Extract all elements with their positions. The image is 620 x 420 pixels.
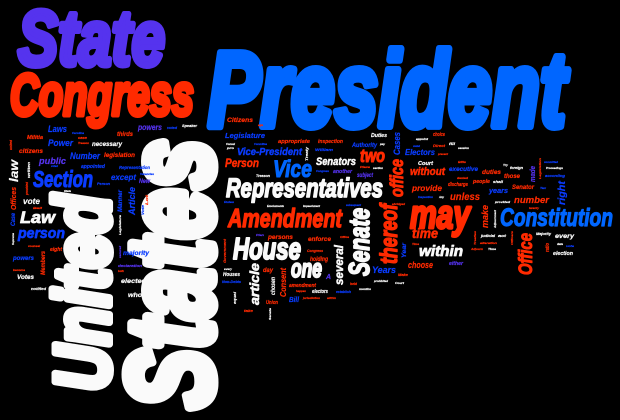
words: upper centre cluster: enforce	[308, 237, 332, 243]
words: right cluster: Adjourn	[470, 247, 483, 251]
words: lower left cluster: become	[13, 268, 25, 272]
words: lower centre cluster: Years	[372, 265, 396, 275]
medium words: left cluster	[7, 123, 162, 226]
medium words: left cluster: public	[38, 156, 66, 166]
words: upper centre cluster: Committee	[254, 142, 267, 146]
words: right cluster: Senator	[512, 185, 535, 191]
words: right cluster: every	[555, 234, 575, 240]
small words: left cluster: Militia	[27, 135, 43, 141]
words: right cluster: provide	[411, 184, 443, 193]
words: right cluster: foreign	[510, 166, 523, 170]
words: lower centre cluster: electors	[312, 289, 328, 295]
words: right cluster: made	[530, 166, 537, 182]
words: lower centre cluster: choose	[408, 260, 433, 270]
words: right cluster: unless	[450, 192, 480, 203]
words: upper centre cluster: Emoluments	[267, 204, 284, 208]
word: may: may	[410, 193, 471, 237]
word: House: House	[233, 231, 301, 266]
words: upper centre cluster: inspection	[318, 139, 343, 145]
words: right cluster: election	[553, 251, 573, 257]
medium words: left cluster: thirds	[117, 132, 134, 138]
words: right cluster: Proceedings	[546, 166, 563, 170]
words: lower centre cluster: day	[263, 268, 274, 274]
words: lower left cluster: powers	[12, 256, 35, 262]
words: lower left cluster: counsel	[28, 244, 40, 248]
word: Office: Office	[516, 233, 537, 275]
words: right cluster: appoint	[416, 137, 429, 141]
words: right cluster: according	[545, 173, 566, 178]
words: lower centre cluster: establish	[336, 289, 351, 294]
word: Section: Section	[33, 166, 93, 192]
word: person: person	[17, 225, 65, 242]
words: upper centre cluster: Treason	[256, 173, 270, 178]
words: upper centre cluster: appropriate	[278, 139, 310, 145]
words: right cluster: Officers	[510, 231, 514, 245]
words: right cluster: twenty	[529, 206, 539, 210]
words: right cluster: right	[557, 180, 568, 205]
words: right cluster: Direct	[433, 143, 446, 148]
words: right cluster: vested	[413, 144, 420, 148]
words: lower left cluster	[12, 244, 150, 299]
words: lower left cluster: eight	[50, 247, 62, 253]
words: upper centre cluster: Legislature	[225, 133, 265, 140]
words: right cluster: choice	[433, 132, 445, 138]
words: right cluster: Time	[488, 247, 496, 251]
words: upper centre cluster: Place	[360, 165, 370, 169]
words: lower centre cluster: chosen	[271, 277, 277, 295]
words: upper centre cluster: pay	[379, 142, 385, 146]
words: upper centre cluster: subsequent	[346, 203, 362, 207]
word: Vice-President: Vice-President	[237, 147, 303, 158]
words: upper centre cluster: age	[258, 123, 263, 127]
words: right cluster: Any	[438, 195, 444, 199]
medium words: left cluster: appointed	[81, 164, 106, 170]
medium words: left cluster: necessary	[92, 142, 123, 148]
words: right cluster: make	[480, 205, 490, 228]
word: Representatives: Representatives	[226, 173, 383, 203]
words: lower centre cluster: Make	[398, 273, 408, 277]
word: time: time	[412, 225, 438, 241]
words: lower centre cluster: Houses	[223, 272, 240, 278]
words: right cluster: denied	[457, 176, 468, 180]
words: right cluster: Adjournment	[493, 209, 497, 229]
words: lower left cluster: whole	[128, 293, 149, 299]
word: Amendment: Amendment	[227, 203, 343, 233]
words: right cluster: number	[514, 195, 550, 205]
medium words: left cluster: Number	[70, 151, 100, 161]
words: upper centre cluster: Cases	[392, 132, 402, 155]
words: right cluster: shall	[493, 179, 504, 184]
words: lower centre cluster: amendment	[289, 283, 316, 289]
words: lower centre cluster: every	[224, 267, 232, 271]
word: States: States	[102, 139, 238, 409]
small words: left cluster: voted	[167, 125, 178, 130]
word: Vice: Vice	[273, 156, 312, 183]
words: lower centre cluster	[222, 238, 464, 320]
small words: left cluster: Supreme	[11, 233, 15, 245]
words: right cluster: people	[472, 179, 490, 185]
small words: left cluster: Vacancies	[140, 172, 154, 176]
words: lower left cluster: elected	[121, 279, 146, 285]
word: several: several	[332, 244, 346, 285]
small words: left cluster: Bail	[33, 206, 42, 210]
words: upper centre cluster: William	[315, 147, 334, 152]
words: upper centre cluster: Impeachment	[303, 204, 321, 208]
words: right cluster: Majority	[536, 232, 552, 236]
medium words: left cluster: Manner	[118, 189, 124, 212]
small words: left cluster: Carolina	[72, 131, 84, 135]
word: without: without	[410, 166, 446, 178]
words: right cluster: committed	[544, 160, 558, 164]
words: right cluster: Bills	[458, 160, 466, 164]
words: lower left cluster: Members	[41, 250, 47, 275]
medium words: left cluster: Case	[11, 212, 17, 226]
words: right cluster: those	[504, 174, 521, 180]
words: upper centre cluster: another	[333, 169, 353, 175]
words: lower centre cluster: prohibited	[373, 279, 388, 283]
words: lower centre cluster: Non-Debts	[222, 280, 241, 284]
words: lower left cluster: secured	[118, 246, 122, 258]
medium words: left cluster: New	[139, 179, 150, 185]
words: lower centre cluster: A	[325, 274, 331, 281]
words: lower centre cluster: holding	[310, 257, 328, 263]
words: right cluster: years	[488, 188, 508, 195]
words: right cluster: Legislation	[538, 158, 542, 179]
small words: left cluster: Speaker	[182, 123, 197, 128]
words: right cluster: provided	[494, 200, 510, 204]
words: right cluster: Court	[418, 161, 433, 167]
medium words: left cluster: powers	[137, 123, 162, 132]
words: lower centre cluster: held	[350, 282, 358, 286]
small words: left cluster: voted	[51, 164, 58, 168]
words: lower centre cluster: jurisdiction	[302, 296, 320, 300]
words: right cluster: act	[498, 233, 507, 238]
word: Senators: Senators	[316, 156, 356, 168]
words: lower centre cluster: within	[327, 296, 336, 300]
small words: left cluster: Legislature	[118, 215, 122, 235]
words: right cluster: alteration	[480, 241, 497, 245]
words: upper centre cluster: subject	[357, 173, 374, 179]
word: one: one	[291, 253, 322, 283]
word: Person: Person	[225, 156, 259, 170]
words: right cluster: Treaties	[473, 231, 477, 245]
small words: left cluster: State	[64, 189, 71, 193]
words: upper centre cluster: Electors	[405, 148, 436, 157]
words: lower centre cluster: Congress	[307, 248, 324, 253]
medium words: left cluster: law	[7, 159, 21, 182]
word: thereof: thereof	[376, 203, 403, 264]
words: upper centre cluster: Duties	[371, 133, 387, 139]
words: right cluster: vote	[566, 244, 574, 248]
words: lower left cluster: both	[118, 269, 124, 273]
medium words: left cluster: except	[111, 173, 136, 182]
words: right cluster: executive	[449, 167, 479, 173]
words: lower centre cluster: take	[244, 308, 254, 313]
word: article: article	[247, 263, 262, 305]
word: Law: Law	[20, 208, 57, 227]
small words: left cluster: Person	[97, 181, 111, 186]
words: lower centre cluster: either	[449, 261, 464, 267]
words: upper centre cluster: Office	[340, 235, 349, 239]
words: upper centre cluster: section	[373, 166, 383, 170]
medium words: left cluster: vote	[23, 197, 41, 206]
words: lower left cluster: majority	[123, 251, 150, 257]
words: lower centre cluster: Senate	[268, 308, 272, 320]
words: lower centre cluster: happen	[296, 289, 306, 293]
words: right cluster: duties	[482, 170, 502, 176]
words: lower left cluster: Votes	[17, 275, 35, 281]
words: upper centre cluster: persons	[267, 235, 294, 241]
small words: left cluster: written	[26, 161, 31, 178]
words: upper centre cluster: Treaty	[304, 146, 309, 161]
small words: left cluster: Lot	[144, 194, 149, 205]
medium words: left cluster: Laws	[48, 124, 67, 134]
word: Senate: Senate	[344, 208, 376, 276]
words: upper centre cluster: Citizens	[227, 118, 254, 124]
word: within: within	[419, 243, 463, 260]
word: office: office	[387, 159, 407, 197]
words: lower centre cluster: equal	[232, 291, 237, 304]
words: right cluster: Try	[503, 163, 508, 167]
words: right cluster: fill	[449, 141, 456, 146]
words: lower centre cluster: Government	[222, 238, 227, 263]
words: lower centre cluster: Year	[402, 242, 408, 258]
words: right cluster: Tax	[540, 186, 546, 190]
small words: left cluster	[8, 123, 197, 245]
word: two: two	[360, 146, 385, 166]
words: lower centre cluster: months	[359, 287, 371, 291]
words: right cluster	[411, 132, 575, 257]
medium words: left cluster: Article	[127, 187, 137, 216]
word: United: United	[38, 194, 126, 391]
words: right cluster: session	[458, 146, 469, 150]
words: right cluster: ratio	[545, 243, 551, 252]
words: right cluster: date	[557, 242, 563, 246]
words: upper centre cluster: Authority	[351, 143, 378, 149]
medium words: left cluster: Representation	[119, 165, 150, 170]
small words: left cluster: provided	[24, 182, 29, 196]
words: lower centre cluster: Bill	[289, 297, 300, 304]
words: lower centre cluster: Consent	[279, 268, 288, 297]
words: upper centre cluster: Congress	[316, 169, 329, 173]
words: upper centre cluster: Rules	[224, 200, 234, 204]
words: lower centre cluster: Union	[266, 300, 278, 306]
words: right cluster: present	[437, 152, 449, 156]
words: lower left cluster: declaration	[118, 263, 143, 268]
words: right cluster: Inspection	[418, 195, 433, 199]
medium words: left cluster: Offices	[11, 187, 18, 210]
small words: left cluster: Treason	[78, 141, 89, 145]
small words: left cluster: case	[78, 135, 88, 140]
words: upper centre cluster: abridged	[392, 202, 405, 206]
medium words: left cluster: Power	[48, 138, 73, 148]
words: right cluster: discharge	[448, 182, 468, 188]
words: lower centre cluster: Court	[395, 281, 405, 285]
medium words: left cluster: citizens	[19, 149, 44, 155]
small words: left cluster: united	[8, 140, 13, 150]
words: right cluster: judicial	[480, 234, 496, 238]
words: lower left cluster: notified	[31, 286, 47, 291]
words: lower centre cluster: Time	[412, 242, 419, 246]
words: upper centre cluster: pro	[226, 146, 234, 150]
words: upper centre cluster: Consul	[226, 142, 235, 146]
small words: left cluster: Vote	[140, 204, 145, 215]
words: upper centre cluster	[224, 118, 436, 243]
word: Congress: Congress	[10, 63, 194, 128]
medium words: left cluster: legislation	[104, 153, 135, 159]
words: upper centre cluster: Plan	[256, 233, 264, 237]
